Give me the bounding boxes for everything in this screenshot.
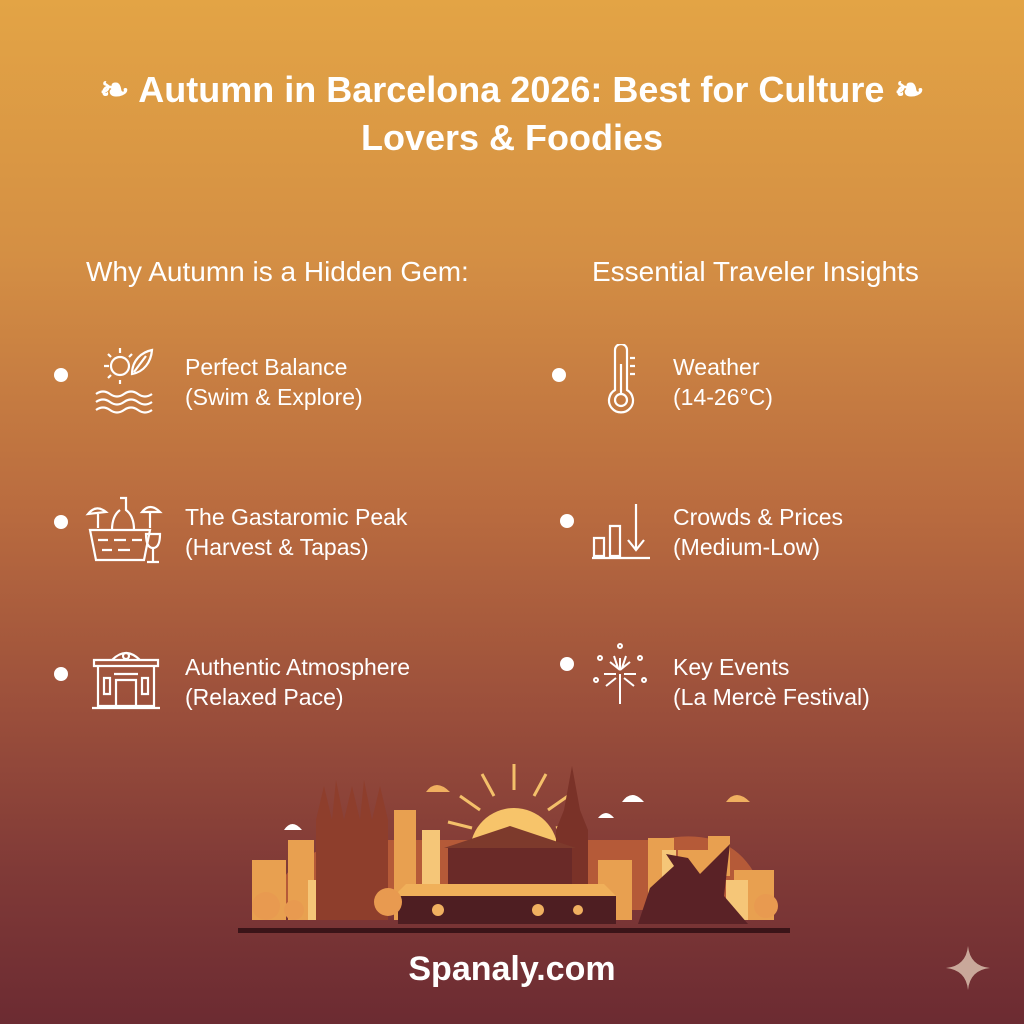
footer: site name: Spanaly.com xyxy=(408,950,616,988)
text: crowds: (Medium-Low) xyxy=(673,534,820,560)
text: perfect balance: (Swim & Explore) xyxy=(185,384,363,410)
icon: bar chart down xyxy=(592,504,650,560)
icon: basket xyxy=(86,496,162,564)
icon: fireworks xyxy=(593,643,647,704)
text: weather: (14-26°C) xyxy=(673,384,773,410)
text: events: (La Mercè Festival) xyxy=(673,684,870,710)
text: gastronomic: (Harvest & Tapas) xyxy=(185,534,369,560)
title xyxy=(99,69,925,158)
text: authentic: Authentic Atmosphere xyxy=(185,654,410,680)
heading: hidden gem: Why Autumn is a Hidden Gem: xyxy=(86,256,469,287)
bullet 5 xyxy=(560,514,574,528)
bullet 1 xyxy=(54,368,68,382)
text: perfect balance: Perfect Balance xyxy=(185,354,347,380)
text: perfect balance xyxy=(185,354,363,410)
text: events xyxy=(673,654,870,710)
title: Lovers & Foodies xyxy=(361,117,663,158)
text: gastronomic xyxy=(185,504,408,560)
text: weather xyxy=(673,354,773,410)
bullet 2 xyxy=(54,515,68,529)
icon: sparkle xyxy=(946,946,990,990)
bullet 4 xyxy=(552,368,566,382)
text: crowds: Crowds & Prices xyxy=(673,504,843,530)
text: weather: Weather xyxy=(673,354,760,380)
icon: building xyxy=(92,652,160,710)
title: ❧ Autumn in Barcelona 2026: Best for Culture ❧ xyxy=(99,69,925,110)
text: authentic xyxy=(185,654,410,710)
icon: sun waves xyxy=(95,348,154,414)
bullet 3 xyxy=(54,667,68,681)
text: authentic: (Relaxed Pace) xyxy=(185,684,344,710)
text: events: Key Events xyxy=(673,654,789,680)
heading: insights: Essential Traveler Insights xyxy=(592,256,919,287)
bullet 6 xyxy=(560,657,574,671)
text: crowds xyxy=(673,504,843,560)
text: gastronomic: The Gastaromic Peak xyxy=(185,504,407,530)
illustration: Barcelona skyline xyxy=(238,764,790,933)
icon: thermometer xyxy=(608,344,635,414)
